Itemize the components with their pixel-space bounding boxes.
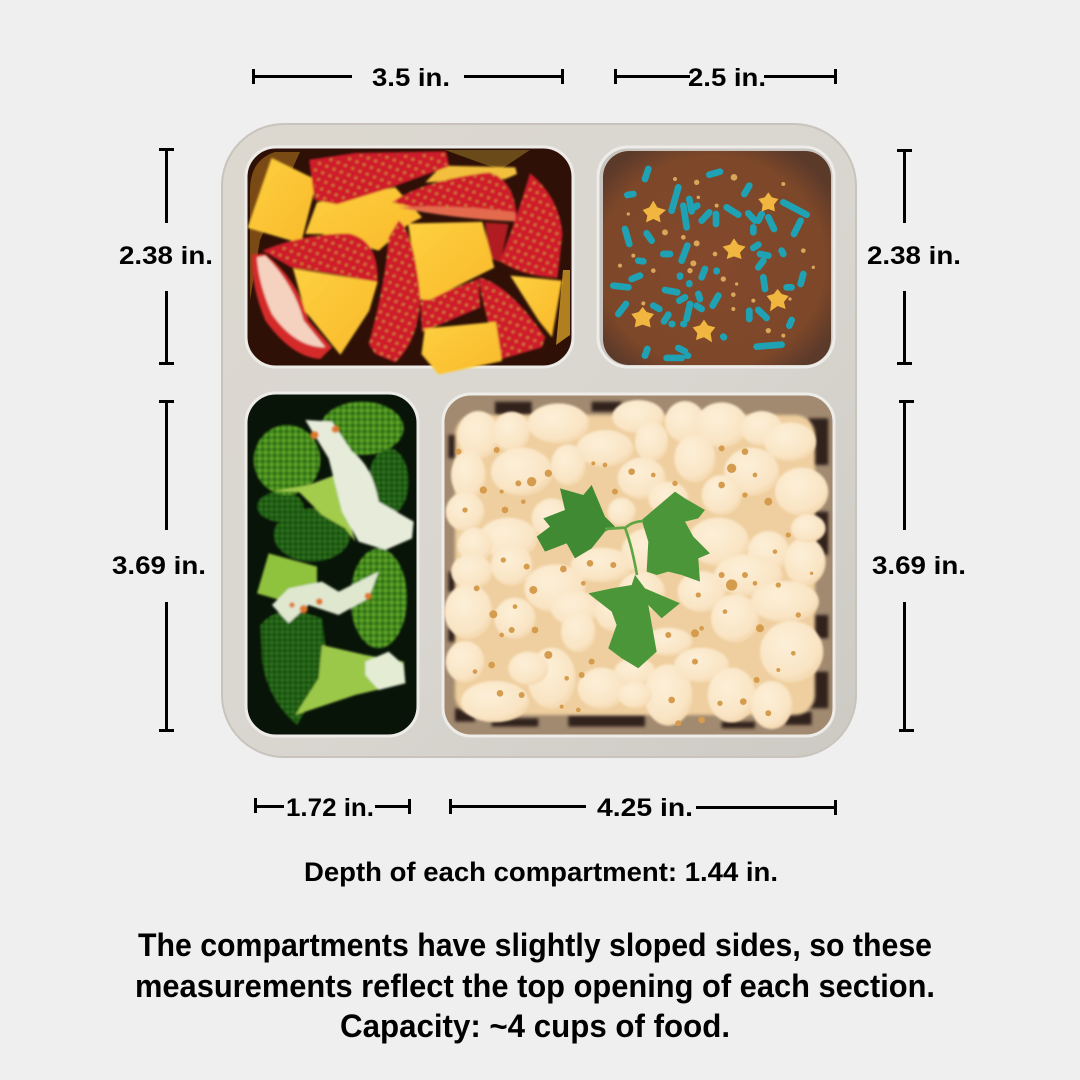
dimension: left lower 3.69 in. [112, 400, 206, 732]
depth caption: Depth of each compartment: 1.44 in. [304, 857, 778, 887]
compartment: mac and cheese [443, 394, 834, 736]
mango: bottom chunk [422, 322, 501, 374]
pasta [444, 400, 828, 729]
compartment: chocolate dip [598, 147, 834, 367]
dimension: top right 2.5 in.: 2.5 in. [688, 64, 766, 92]
dimension: bottom left 1.72 in.: 1.72 in. [286, 794, 374, 822]
footnote: The compartments have slightly sloped sides, so these [138, 927, 932, 963]
parsley: right leaf [642, 492, 710, 582]
strawberry: pale flesh [257, 256, 325, 347]
stem: cut piece [257, 553, 317, 602]
mango: centre [409, 222, 494, 299]
dimension: bottom left 1.72 in. [254, 794, 411, 822]
dimension: right lower 3.69 in. [872, 400, 966, 732]
dressing: middle [272, 572, 379, 623]
stem: upper [272, 475, 355, 542]
strawberry: low right [479, 277, 545, 359]
shadow gaps [448, 402, 828, 728]
pepper flakes [289, 426, 371, 613]
footnote [135, 927, 935, 1044]
floret: middle [274, 508, 350, 562]
gold stars [631, 192, 789, 342]
dimension: bottom right 4.25 in.: 4.25 in. [597, 794, 693, 822]
strawberry: upper slice [392, 172, 517, 221]
pasta shells [444, 400, 828, 729]
broccoli pieces [254, 402, 414, 725]
parsley: bottom leaf [588, 575, 680, 668]
floret: dark background [369, 448, 409, 515]
dimension: top left 3.5 in. [252, 64, 564, 92]
stem: bottom pale [295, 645, 405, 715]
dimension: left upper 2.38 in. [119, 148, 213, 365]
floret: top left [254, 425, 320, 495]
gold crumbs [618, 174, 815, 338]
floret: dark left [257, 492, 304, 522]
dimension: left upper 2.38 in.: 2.38 in. [119, 242, 213, 270]
mango: top stripe [425, 166, 517, 182]
compartment: broccoli [246, 393, 418, 736]
mango: right wedge [510, 276, 562, 337]
mango: large back piece [305, 187, 422, 251]
compartment: fruit [246, 147, 573, 374]
strawberry: pale cut slice [252, 254, 332, 359]
dimension: left lower 3.69 in.: 3.69 in. [112, 552, 206, 580]
dimension: top left 3.5 in.: 3.5 in. [372, 64, 450, 92]
footnote: measurements reflect the top opening of each section. [135, 968, 935, 1004]
tray [222, 124, 856, 757]
sprinkles and stars [613, 169, 815, 358]
dressing: upper [305, 420, 414, 550]
parsley: stem [605, 521, 643, 575]
mango: top left cube [249, 159, 316, 242]
strawberry: left slice [264, 234, 377, 282]
parsley: left leaf [537, 485, 615, 558]
dimension: bottom right 4.25 in. [449, 794, 837, 822]
parsley [537, 485, 710, 668]
strawberry: low middle [420, 279, 480, 332]
dressing: bottom [365, 652, 405, 690]
pasta base [455, 415, 815, 715]
strawberry: flesh edge [399, 206, 515, 221]
dimension: right lower 3.69 in.: 3.69 in. [872, 552, 966, 580]
footnote: Capacity: ~4 cups of food. [340, 1008, 730, 1044]
fruit pieces [249, 152, 562, 374]
floret: right [350, 548, 407, 648]
floret: bottom [260, 611, 329, 725]
strawberry: right [500, 174, 562, 277]
teal sprinkles [613, 169, 807, 358]
dimension: right upper 2.38 in.: 2.38 in. [867, 242, 961, 270]
strawberry: long upright [369, 221, 420, 362]
floret: top right [320, 402, 404, 455]
breadcrumbs [455, 445, 813, 726]
dimension: top right 2.5 in. [614, 64, 837, 92]
strawberry: top [310, 152, 448, 203]
strawberry: back centre [485, 222, 509, 262]
dimension: right upper 2.38 in. [867, 149, 961, 365]
mango: triangle [294, 269, 377, 354]
